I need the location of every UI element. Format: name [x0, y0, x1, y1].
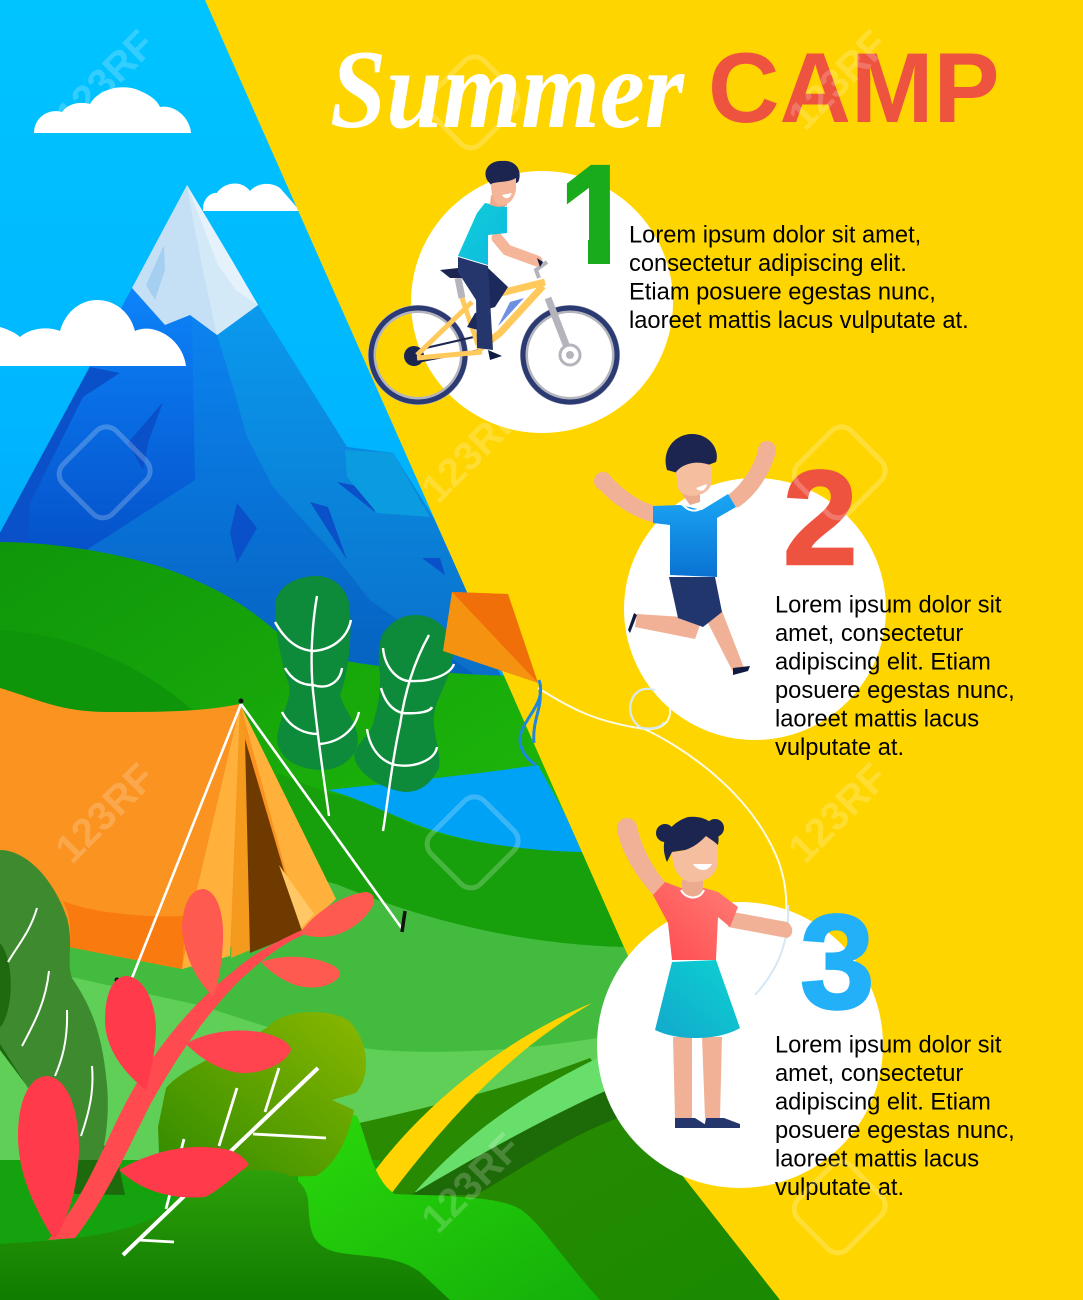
watermarks: 123RF — [780, 755, 896, 871]
hill: middle dark green — [277, 773, 640, 960]
cloud: by the peak — [203, 183, 300, 211]
grass blade: dark — [411, 1088, 625, 1195]
hill: dark foreground mound — [0, 1170, 450, 1300]
text block: step 1: laoreet mattis lacus vulputate at. — [629, 308, 969, 334]
shoes — [628, 613, 750, 675]
grass blade: pale green — [415, 1052, 612, 1192]
plant: red branch with leaves — [18, 889, 374, 1240]
boy: shirt — [458, 203, 507, 265]
grass blade: yellow — [374, 1003, 592, 1194]
number 1: 1 — [559, 133, 634, 312]
text block: step 3: Lorem ipsum dolor sit — [775, 1032, 1002, 1058]
circle: step 1 — [411, 171, 673, 433]
meadow: light green band — [70, 882, 628, 1052]
boy: arm — [497, 238, 537, 261]
arms — [617, 818, 792, 938]
tree: left shrub — [275, 576, 359, 816]
text block: step 2: amet, consectetur — [775, 621, 963, 647]
watermarks: 123RF — [413, 1125, 529, 1241]
text block: step 1: consectetur adipiscing elit. — [629, 251, 907, 277]
watermarks: 123RF — [47, 22, 163, 138]
text block: step 3: amet, consectetur — [775, 1061, 963, 1087]
figure: running boy — [594, 434, 776, 675]
bush: dark green left — [0, 850, 125, 1195]
watermarks — [47, 22, 896, 1259]
text block: step 2: laoreet mattis lacus — [775, 706, 979, 732]
foreground: bright green ground left — [0, 1160, 380, 1244]
cloud: top left — [34, 87, 191, 133]
hill: upper meadow — [0, 542, 640, 960]
text block: step 1: Etiam posuere egestas nunc, — [629, 280, 936, 306]
head — [656, 817, 724, 899]
mountain — [0, 185, 510, 700]
title: CAMP: CAMP — [708, 32, 1000, 143]
number 3: 3 — [800, 888, 875, 1037]
panel: landscape scene — [0, 0, 780, 1300]
bright green mound — [298, 1115, 600, 1300]
text block: step 3: adipiscing elit. Etiam — [775, 1090, 991, 1116]
boy: trousers — [458, 257, 493, 350]
head — [666, 434, 717, 505]
bicycle — [371, 262, 617, 402]
shirt — [653, 494, 736, 577]
number 2: 2 — [783, 444, 858, 593]
text block: step 3: posuere egestas nunc, — [775, 1118, 1015, 1144]
kite string on yellow — [538, 688, 786, 995]
watermarks: 123RF — [413, 395, 529, 511]
arms and legs — [594, 441, 776, 672]
boy: shoe and hand — [488, 258, 543, 360]
river — [328, 765, 590, 860]
title: Summer: Summer — [330, 28, 685, 152]
boy: far leg, trousers — [467, 268, 508, 330]
text block: step 3: laoreet mattis lacus — [775, 1146, 979, 1172]
text block: step 3: vulputate at. — [775, 1175, 904, 1201]
branches: white twigs over olive bush — [123, 1068, 326, 1255]
tree: right shrub — [354, 615, 454, 831]
foreground: right hill — [350, 1058, 780, 1300]
kite with tail — [443, 592, 541, 765]
text block: step 2: Lorem ipsum dolor sit — [775, 592, 1002, 618]
text block: step 2: vulputate at. — [775, 735, 904, 761]
tent — [0, 688, 405, 982]
number 1 — [566, 164, 610, 264]
circle: step 2 — [624, 478, 886, 740]
circle: step 3 — [597, 902, 883, 1188]
skirt — [655, 960, 740, 1038]
text block: step 2: adipiscing elit. Etiam — [775, 650, 991, 676]
watermarks: 123RF — [47, 755, 163, 871]
figure: waving girl — [617, 817, 792, 1128]
bush: olive — [158, 1012, 366, 1180]
text block: step 1: Lorem ipsum dolor sit amet, — [629, 222, 921, 248]
shoes — [675, 1118, 740, 1128]
shorts — [669, 577, 722, 627]
meadow: lightest band — [0, 977, 598, 1160]
watermarks: 123RF — [780, 22, 896, 138]
sky — [0, 0, 515, 700]
shirt — [653, 882, 738, 960]
kite string inside circles — [630, 689, 788, 995]
collar — [681, 503, 702, 511]
legs — [673, 1037, 722, 1118]
hill: dark inner slope — [0, 641, 192, 712]
boy: head — [485, 161, 520, 207]
title — [330, 28, 1000, 152]
text block: step 2: posuere egestas nunc, — [775, 678, 1015, 704]
cloud: left of mountain — [0, 300, 186, 366]
figure: boy on bicycle — [371, 161, 617, 402]
